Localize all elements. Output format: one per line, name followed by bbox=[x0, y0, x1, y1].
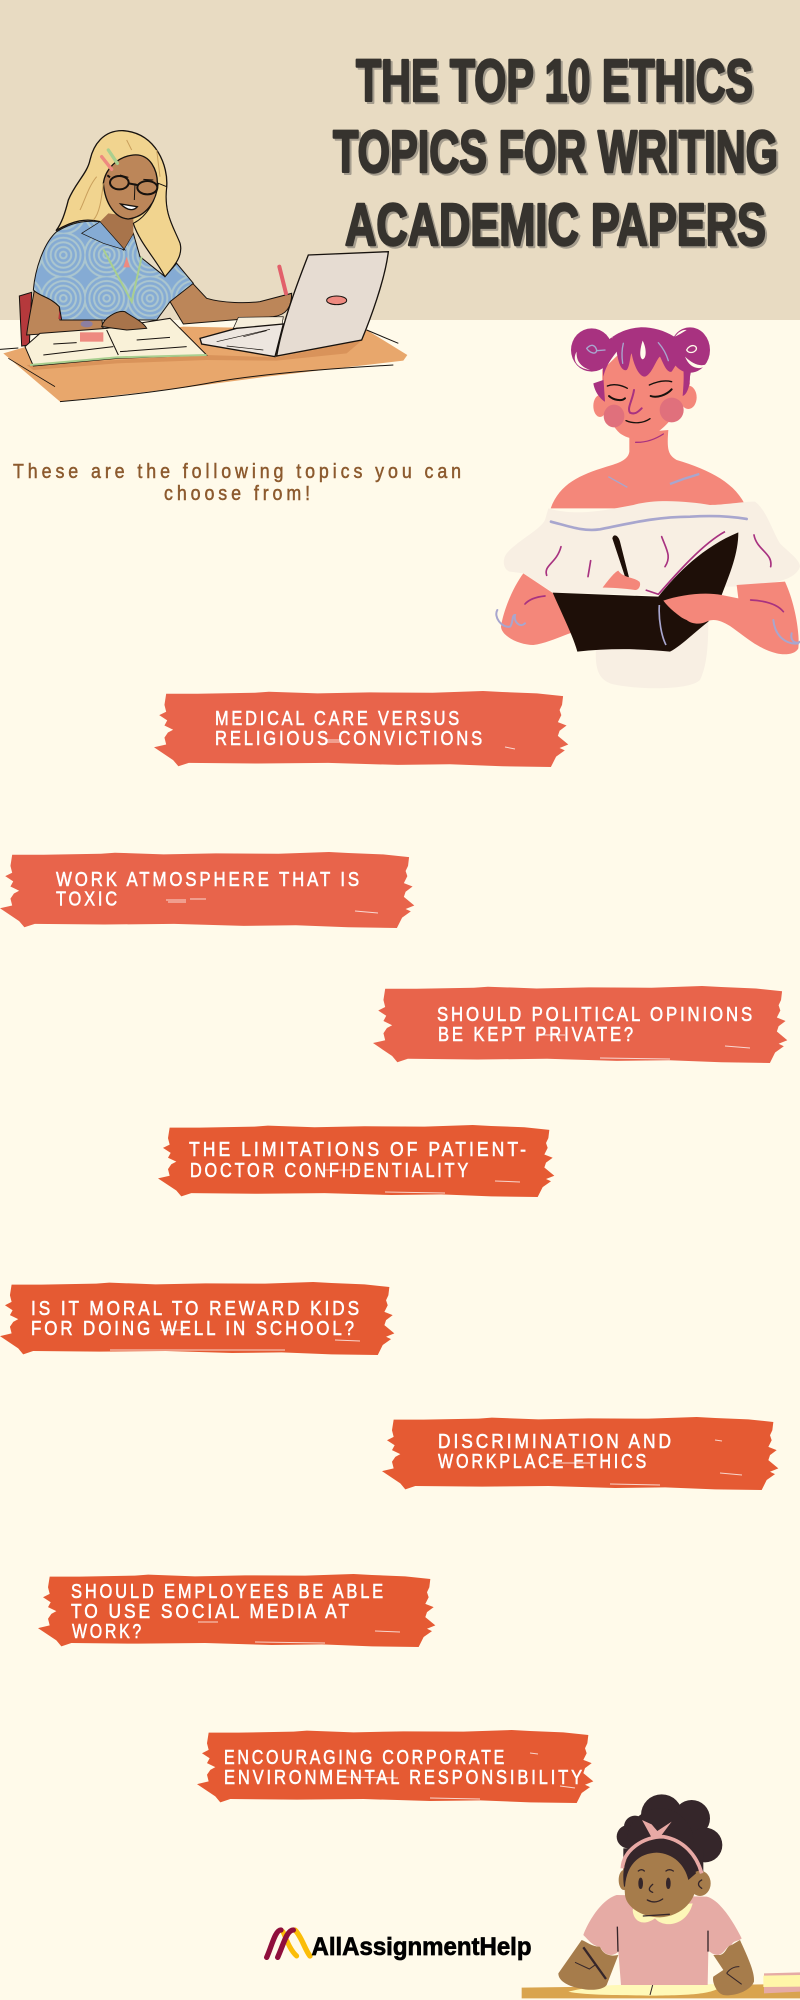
topic 7: SHOULD EMPLOYEES BE ABLE bbox=[71, 1580, 386, 1603]
open book bbox=[25, 318, 207, 366]
ears bbox=[619, 1870, 629, 1890]
header band bbox=[0, 0, 800, 320]
topic 2: WORK ATMOSPHERE THAT IS bbox=[56, 868, 362, 891]
lower blouse bbox=[596, 620, 708, 688]
topic 1: MEDICAL CARE VERSUS bbox=[215, 707, 462, 730]
blush bbox=[604, 405, 624, 427]
logo wordmark: AllAssignmentHelp bbox=[312, 1933, 532, 1961]
title bbox=[333, 48, 778, 258]
topic 1 bbox=[154, 691, 568, 767]
arm marks bbox=[525, 596, 783, 612]
sticky note bbox=[80, 332, 103, 342]
hand bbox=[102, 311, 147, 330]
face details bbox=[638, 1870, 702, 1916]
hair back bbox=[56, 131, 181, 277]
face bbox=[103, 155, 157, 219]
topic 4 bbox=[158, 1125, 554, 1197]
blouse bbox=[504, 501, 800, 597]
right arm and hand bbox=[663, 582, 799, 654]
collar bbox=[633, 1903, 693, 1924]
chair bbox=[19, 292, 32, 346]
illustration: girl writing at table bbox=[522, 1794, 800, 1998]
laptop base bbox=[200, 324, 283, 357]
glasses bbox=[107, 175, 157, 194]
right arm bbox=[170, 283, 292, 324]
collar and neck bbox=[100, 213, 133, 250]
neck and shoulders bbox=[551, 430, 747, 508]
illustration: woman writing in notebook bbox=[496, 327, 800, 688]
nose bbox=[629, 390, 642, 413]
collarbones bbox=[608, 477, 627, 487]
pen bbox=[279, 267, 286, 293]
topic 8: ENVIRONMENTAL RESPONSIBILITY bbox=[224, 1766, 585, 1789]
pendant bbox=[123, 257, 130, 267]
topic 5: IS IT MORAL TO REWARD KIDS bbox=[31, 1297, 362, 1320]
hair highlights bbox=[575, 329, 710, 370]
topic 7: TO USE SOCIAL MEDIA AT bbox=[71, 1600, 352, 1623]
illustration: woman at desk with laptop bbox=[0, 131, 407, 402]
topic 2: TOXIC bbox=[56, 888, 120, 910]
topic 3 bbox=[373, 986, 787, 1063]
logo mark bbox=[267, 1930, 310, 1957]
pen bbox=[612, 535, 629, 577]
desk shadow bbox=[27, 341, 362, 370]
front hair bbox=[133, 183, 181, 277]
blouse trim bbox=[551, 516, 747, 530]
notepad bbox=[233, 317, 283, 328]
arm details bbox=[575, 1962, 742, 1984]
paper bbox=[568, 1984, 723, 1996]
desk bbox=[3, 327, 407, 402]
chin line bbox=[636, 434, 663, 442]
hair bbox=[617, 1794, 722, 1875]
ribbon bbox=[642, 1820, 672, 1838]
dress bbox=[583, 1895, 742, 1985]
stacked books bbox=[764, 1972, 800, 1993]
lanyard bbox=[103, 249, 142, 302]
topic 5: FOR DOING WELL IN SCHOOL? bbox=[31, 1317, 357, 1340]
intro text: choose from! bbox=[164, 482, 314, 505]
writing hand bbox=[603, 571, 640, 590]
topic 7: WORK? bbox=[72, 1620, 144, 1643]
intro text bbox=[13, 460, 465, 505]
topic 8 bbox=[197, 1730, 593, 1803]
intro text: These are the following topics you can bbox=[13, 460, 465, 483]
topic 6: DISCRIMINATION AND bbox=[438, 1430, 674, 1453]
topic 1: RELIGIOUS CONVICTIONS bbox=[215, 727, 485, 750]
topic 3: BE KEPT PRIVATE? bbox=[438, 1023, 636, 1046]
headband bbox=[622, 1837, 702, 1873]
logo bbox=[267, 1930, 532, 1961]
hair fringe bbox=[593, 327, 693, 402]
face bbox=[602, 343, 690, 439]
laptop lid bbox=[277, 252, 388, 356]
eyes, brows, mouth bbox=[607, 381, 672, 423]
table bbox=[522, 1984, 800, 1998]
shirt bbox=[33, 221, 193, 320]
smile bbox=[121, 204, 137, 210]
left arm bbox=[27, 290, 103, 335]
topic 6: WORKPLACE ETHICS bbox=[438, 1450, 649, 1473]
topic 5 bbox=[0, 1282, 394, 1355]
hair buns bbox=[571, 328, 612, 372]
face bbox=[623, 1851, 697, 1917]
left arm bbox=[501, 573, 572, 645]
hairline bbox=[623, 1840, 696, 1887]
topic 4: DOCTOR CONFIDENTIALITY bbox=[190, 1159, 471, 1182]
pencil bbox=[583, 1947, 606, 1979]
topic 6 bbox=[382, 1417, 778, 1490]
left arm bbox=[558, 1940, 618, 1990]
topic 7 bbox=[38, 1574, 435, 1647]
topic 2 bbox=[0, 852, 414, 928]
notebook bbox=[553, 532, 738, 652]
watch bbox=[81, 321, 93, 327]
topic 8: ENCOURAGING CORPORATE bbox=[224, 1746, 507, 1769]
hair clips bbox=[102, 157, 112, 169]
topic 4: THE LIMITATIONS OF PATIENT- bbox=[189, 1138, 529, 1161]
nose and brows bbox=[120, 175, 153, 200]
right arm bbox=[713, 1940, 754, 1995]
laptop logo bbox=[327, 296, 347, 305]
ears bbox=[593, 395, 607, 417]
